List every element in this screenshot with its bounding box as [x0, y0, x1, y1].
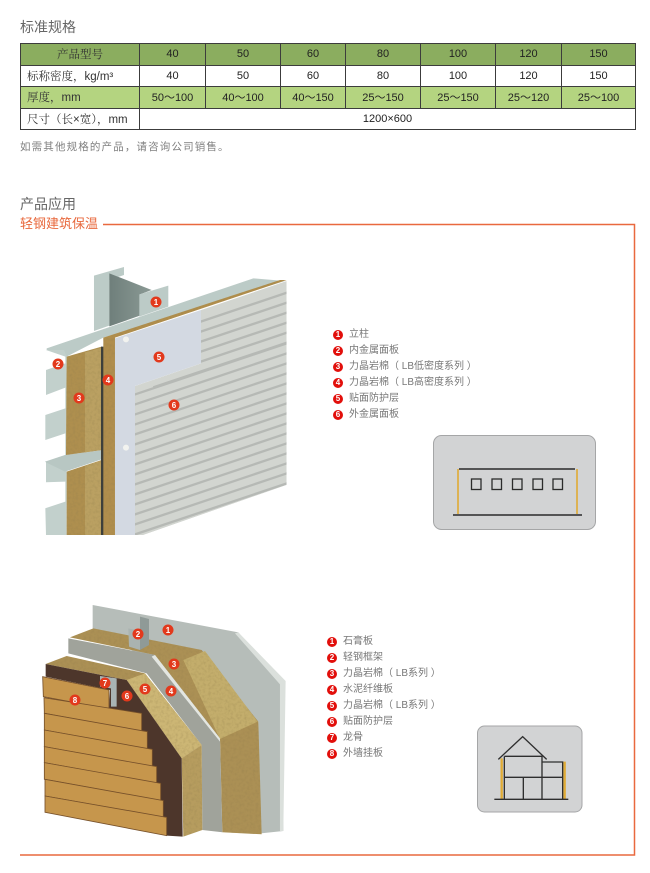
badges: wall section: 4 [106, 376, 111, 385]
badges: composite wall: 6 [125, 692, 130, 701]
legend: steel wall: 1 [336, 330, 340, 339]
badges: composite wall: 2 [136, 630, 141, 639]
row: product model [21, 44, 635, 126]
row: thickness: 25～100 [578, 92, 619, 104]
heading: product application: 产品应用 [20, 196, 76, 212]
gypsum board [93, 605, 286, 834]
row: nominal density: 50 [237, 70, 249, 82]
row: thickness: 40～150 [292, 92, 334, 104]
badges: composite wall: 3 [172, 660, 177, 669]
legend: composite wall: 水泥纤维板 [343, 684, 393, 695]
row: product model: 100 [449, 48, 467, 60]
gap [101, 347, 104, 535]
row: thickness: 厚度，mm [27, 92, 81, 104]
row: product model: 60 [307, 48, 319, 60]
heading: standard specifications: 标准规格 [20, 19, 76, 35]
row: thickness: 40～100 [222, 92, 264, 104]
subheading: light steel building insulation: 轻钢建筑保温 [20, 216, 98, 231]
legend: steel wall: 3 [336, 362, 340, 371]
legend: composite wall: 1 [330, 637, 334, 646]
row: product model: 120 [519, 48, 538, 60]
row: thickness [21, 87, 635, 108]
inner metal panel [45, 278, 285, 535]
legend: steel wall: 内金属面板 [349, 345, 399, 356]
legend: composite wall: 轻钢框架 [343, 652, 383, 663]
legend: composite wall: 龙骨 [343, 732, 363, 743]
badges: composite wall: 5 [143, 685, 148, 694]
legend: steel wall: 4 [336, 378, 340, 387]
badges: wall section: 3 [77, 394, 82, 403]
badges: composite wall: 8 [73, 696, 78, 705]
rock wool low density [66, 347, 102, 535]
row: thickness: 25～120 [508, 92, 549, 104]
badges: wall section: 5 [157, 353, 162, 362]
row: product model: 50 [237, 48, 249, 60]
legend: composite wall: 8 [330, 749, 334, 758]
steel column [94, 267, 168, 331]
badges: wall section: 1 [154, 298, 159, 307]
table: specifications [20, 43, 636, 130]
legend: steel wall: 6 [336, 410, 340, 419]
cement fibre board [68, 638, 222, 832]
row: thickness: 25～150 [362, 92, 404, 104]
row: size [27, 113, 412, 126]
legend: composite wall [327, 635, 441, 759]
legend: steel wall: 5 [336, 394, 340, 403]
legend: composite wall: 外墙挂板 [343, 748, 383, 759]
rock wool high density [103, 280, 287, 535]
row: nominal density: 60 [307, 70, 319, 82]
legend: composite wall: 石膏板 [343, 636, 373, 647]
legend: steel wall: 力晶岩棉（ LB高密度系列 ） [349, 377, 477, 388]
legend: composite wall: 4 [330, 685, 334, 694]
legend: composite wall: 6 [330, 717, 334, 726]
row: nominal density: 标称密度，kg/m³ [27, 71, 113, 83]
badges: composite wall: 1 [166, 626, 171, 635]
facing layer [46, 664, 183, 837]
row: nominal density: 40 [166, 70, 179, 82]
legend: steel wall: 2 [336, 346, 340, 355]
row: nominal density: 150 [589, 70, 608, 82]
row: thickness: 25～150 [437, 92, 479, 104]
row: product model: 80 [377, 48, 389, 60]
legend: composite wall: 2 [330, 653, 334, 662]
legend: steel wall: 贴面防护层 [349, 393, 399, 404]
legend: composite wall: 3 [330, 669, 334, 678]
row: size: 尺寸（长×宽），mm [27, 114, 128, 126]
outer metal panel [133, 281, 290, 535]
badges: wall section: 2 [56, 360, 61, 369]
badges: composite wall [70, 624, 180, 706]
wood siding [43, 677, 167, 836]
legend: steel wall [333, 328, 477, 420]
badges: wall section: 6 [172, 401, 177, 410]
legend: composite wall: 7 [330, 733, 334, 742]
legend: composite wall: 力晶岩棉（ LB系列 ） [343, 668, 441, 679]
row: nominal density: 120 [519, 70, 538, 82]
row: nominal density: 100 [449, 70, 467, 82]
illustration: steel wall section [45, 267, 286, 535]
row: product model: 产品型号 [57, 49, 103, 61]
badges: composite wall: 4 [169, 687, 174, 696]
row: product model: 150 [589, 48, 608, 60]
legend: steel wall: 外金属面板 [349, 409, 399, 420]
legend: composite wall: 力晶岩棉（ LB系列 ） [343, 700, 441, 711]
facing layer [115, 310, 201, 535]
row: nominal density [27, 70, 608, 83]
row: product model: 40 [166, 48, 179, 60]
row: size: 1200×600 [363, 113, 412, 125]
stud [100, 676, 117, 707]
row: thickness: 50～100 [152, 92, 193, 104]
legend: steel wall: 力晶岩棉（ LB低密度系列 ） [349, 361, 477, 372]
badges: wall section [52, 296, 180, 410]
row: nominal density: 80 [377, 70, 389, 82]
badges: composite wall: 7 [103, 679, 108, 688]
light steel frame [128, 617, 149, 650]
legend: composite wall: 5 [330, 701, 334, 710]
legend: steel wall: 立柱 [349, 329, 369, 340]
rock wool back [70, 628, 262, 834]
legend: composite wall: 贴面防护层 [343, 716, 393, 727]
note: contact sales: 如需其他规格的产品，请咨询公司销售。 [20, 141, 230, 153]
rock wool front [46, 656, 202, 837]
